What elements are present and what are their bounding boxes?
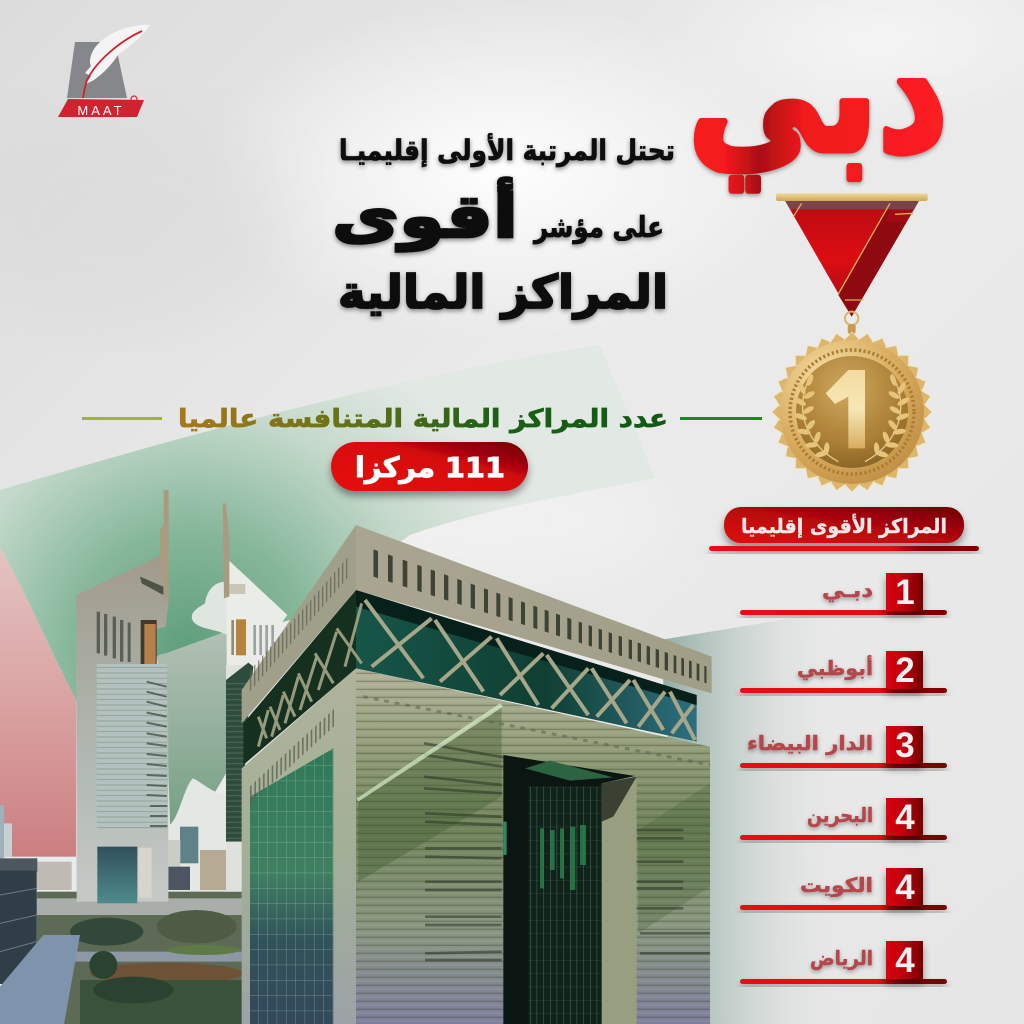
rule left: [82, 417, 162, 420]
flag wave: right side shadow: [660, 612, 840, 1024]
darker diagonal tint: [358, 707, 502, 882]
dentil course: [363, 697, 710, 765]
rank 4 Bahrain: 4: [895, 798, 915, 837]
heading line 3: المراكز المالية: [338, 265, 668, 319]
flag wave: green: [0, 345, 655, 700]
rank 4 Bahrain: البحرين: [807, 803, 873, 827]
title: Dubai: دبي: [688, 0, 948, 191]
panel: strongest regional centres: [709, 507, 979, 984]
glass band front: [356, 590, 697, 742]
ground and trees: [37, 892, 243, 1024]
logo grey trapezoid: [67, 42, 127, 98]
rank 4 Kuwait: الكويت: [800, 873, 873, 897]
cornice front: [356, 525, 712, 693]
metric heading: عدد المراكز المالية المتنافسة عالميا: [178, 404, 668, 434]
diagonal light streak: [357, 703, 503, 802]
medal laurels and numeral: [793, 370, 910, 462]
rank 3 Casablanca: [740, 726, 947, 768]
medal hanging bar: [776, 193, 928, 201]
metric value pill: 111 مركزا: [355, 451, 505, 484]
medal ring: [845, 312, 858, 325]
rank 4 Kuwait: 4: [895, 868, 915, 907]
rank 1 Dubai: [740, 573, 947, 615]
tower base opening: [97, 847, 137, 903]
rank 3 Casablanca: 3: [895, 726, 915, 765]
left window: [250, 748, 333, 1024]
heading block: [332, 133, 675, 319]
medal scalloped edge: [772, 332, 932, 492]
panel heading rule: [709, 546, 979, 551]
front lattice: [365, 600, 695, 740]
rule right: [680, 417, 762, 420]
medal ribbon: [776, 193, 928, 334]
rank 4 Bahrain: [740, 798, 947, 840]
flag wave: red: [0, 547, 76, 878]
heading line 2 small: على مؤشر: [532, 210, 664, 244]
rank 2 Abu Dhabi: أبوظبي: [797, 654, 873, 681]
heading line 1: تحتل المرتبة الأولى إقليميـا: [339, 133, 675, 168]
door grid and reflections: [503, 787, 602, 1024]
metric heading with rules: [82, 404, 762, 434]
Dubai skyline photo: [0, 490, 287, 1024]
rank 1 Dubai: 1: [895, 573, 915, 612]
panel heading pill: [724, 507, 964, 543]
panel heading pill: المراكز الأقوى إقليميا: [741, 513, 947, 538]
left lattice: [258, 603, 362, 747]
glass band left: [243, 590, 356, 765]
left dark building: [0, 858, 37, 984]
cloud lower and sky: [168, 778, 230, 893]
DIFC Gate building: [242, 525, 712, 1024]
sky left: [0, 857, 77, 893]
tower: second Emirates: [223, 503, 287, 892]
rank 4 Riyadh: [740, 941, 947, 984]
front body face: [356, 668, 710, 1024]
logo feather: [85, 25, 150, 84]
rank 2 Abu Dhabi: [740, 651, 947, 693]
left face slits: [250, 718, 334, 795]
door opening: [503, 755, 637, 1024]
logo wordmark: MAAT: [77, 103, 125, 118]
rank 4 Kuwait: [740, 868, 947, 910]
tower: Emirates office: [76, 490, 169, 903]
logo red banner: [58, 99, 144, 117]
rank 2 Abu Dhabi: 2: [895, 651, 915, 690]
grey wave between towers: [157, 630, 230, 825]
rank 4 Riyadh: الرياض: [810, 946, 873, 970]
medal: [772, 193, 932, 492]
grey roof: [0, 935, 80, 1024]
metric value pill: [331, 442, 528, 491]
cornice left: [242, 525, 356, 723]
rank 1 Dubai: دبـي: [822, 578, 873, 603]
medal disc: [780, 340, 924, 484]
cloud upper: [192, 582, 230, 637]
dark brick courses: [424, 743, 710, 960]
distant buildings: [0, 805, 226, 890]
logo: MAAT: [58, 25, 150, 118]
rank 4 Riyadh: 4: [895, 941, 915, 980]
left body face: [242, 668, 356, 1024]
heading line 2 large: أقوى: [332, 177, 518, 252]
rank 3 Casablanca: الدار البيضاء: [747, 731, 873, 755]
door soffit: [525, 761, 613, 781]
tower spire: [160, 490, 169, 605]
